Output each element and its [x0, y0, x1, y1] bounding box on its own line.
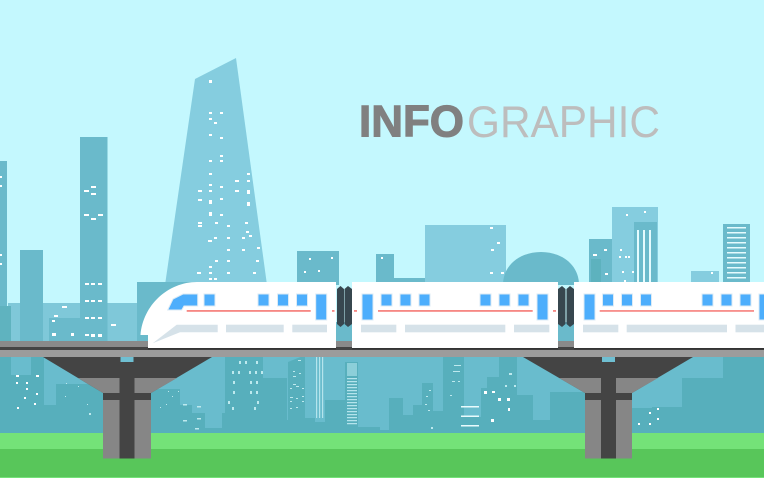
car body [352, 282, 558, 348]
title: INFO [359, 98, 464, 146]
pale window lights: lower city [65, 360, 516, 430]
bottom edge [574, 348, 764, 350]
building: stepped block [376, 254, 445, 285]
windows [204, 294, 327, 320]
gap pillar between cars 1 and 2 [336, 322, 352, 342]
building: wide block [425, 225, 506, 285]
building: low block [49, 318, 80, 346]
car body [140, 282, 336, 348]
building: right cluster inset [591, 259, 601, 285]
bridge pier right [523, 357, 693, 458]
windows [584, 294, 764, 320]
building: short tower [20, 250, 43, 346]
building: tall tower [80, 137, 108, 345]
building: right cluster [612, 207, 658, 285]
white window lights: lower city [16, 375, 659, 425]
lower panels [361, 325, 549, 332]
gap pillar between cars 2 and 3 [558, 322, 574, 342]
bottom edge [148, 348, 336, 350]
train car 2 [352, 282, 558, 350]
skyline: lower city [0, 352, 764, 434]
white ledge lines [461, 406, 479, 426]
building: small light block [691, 271, 719, 285]
light tower panel [347, 363, 357, 376]
building: left edge tower [0, 161, 7, 346]
train car 1 [140, 282, 336, 350]
train car 3 [574, 282, 764, 350]
building: right cluster front [589, 239, 612, 285]
light stripes on towers [637, 227, 746, 285]
windows [362, 294, 548, 320]
lower city background [0, 352, 764, 434]
bridge pier left [43, 357, 212, 458]
red stripe [354, 310, 556, 312]
title [359, 98, 660, 147]
building: dome [503, 252, 579, 285]
skyline: upper city [0, 58, 750, 348]
title: GRAPHIC [467, 98, 660, 147]
building: glass tower [165, 58, 267, 285]
elevated track [0, 341, 764, 357]
coupler left [337, 286, 352, 327]
red stripe [187, 310, 334, 312]
building: ribbed tower [723, 224, 750, 285]
building: back band [8, 303, 138, 348]
building: block behind train nose [137, 282, 199, 344]
car body [574, 282, 764, 348]
front windshield [168, 294, 198, 310]
ground: grass [0, 433, 764, 478]
bottom edge [352, 348, 558, 350]
red stripe [600, 310, 754, 312]
lower panels [153, 325, 327, 343]
coupler right [558, 286, 574, 327]
building: striped tower [634, 222, 657, 285]
building: mid block [297, 251, 339, 285]
lower city dark skyline [0, 352, 764, 434]
building: left corner block [0, 306, 11, 346]
window lights: upper city [0, 80, 713, 337]
light stripes: lower city towers [316, 357, 357, 424]
lower panels [583, 325, 764, 332]
